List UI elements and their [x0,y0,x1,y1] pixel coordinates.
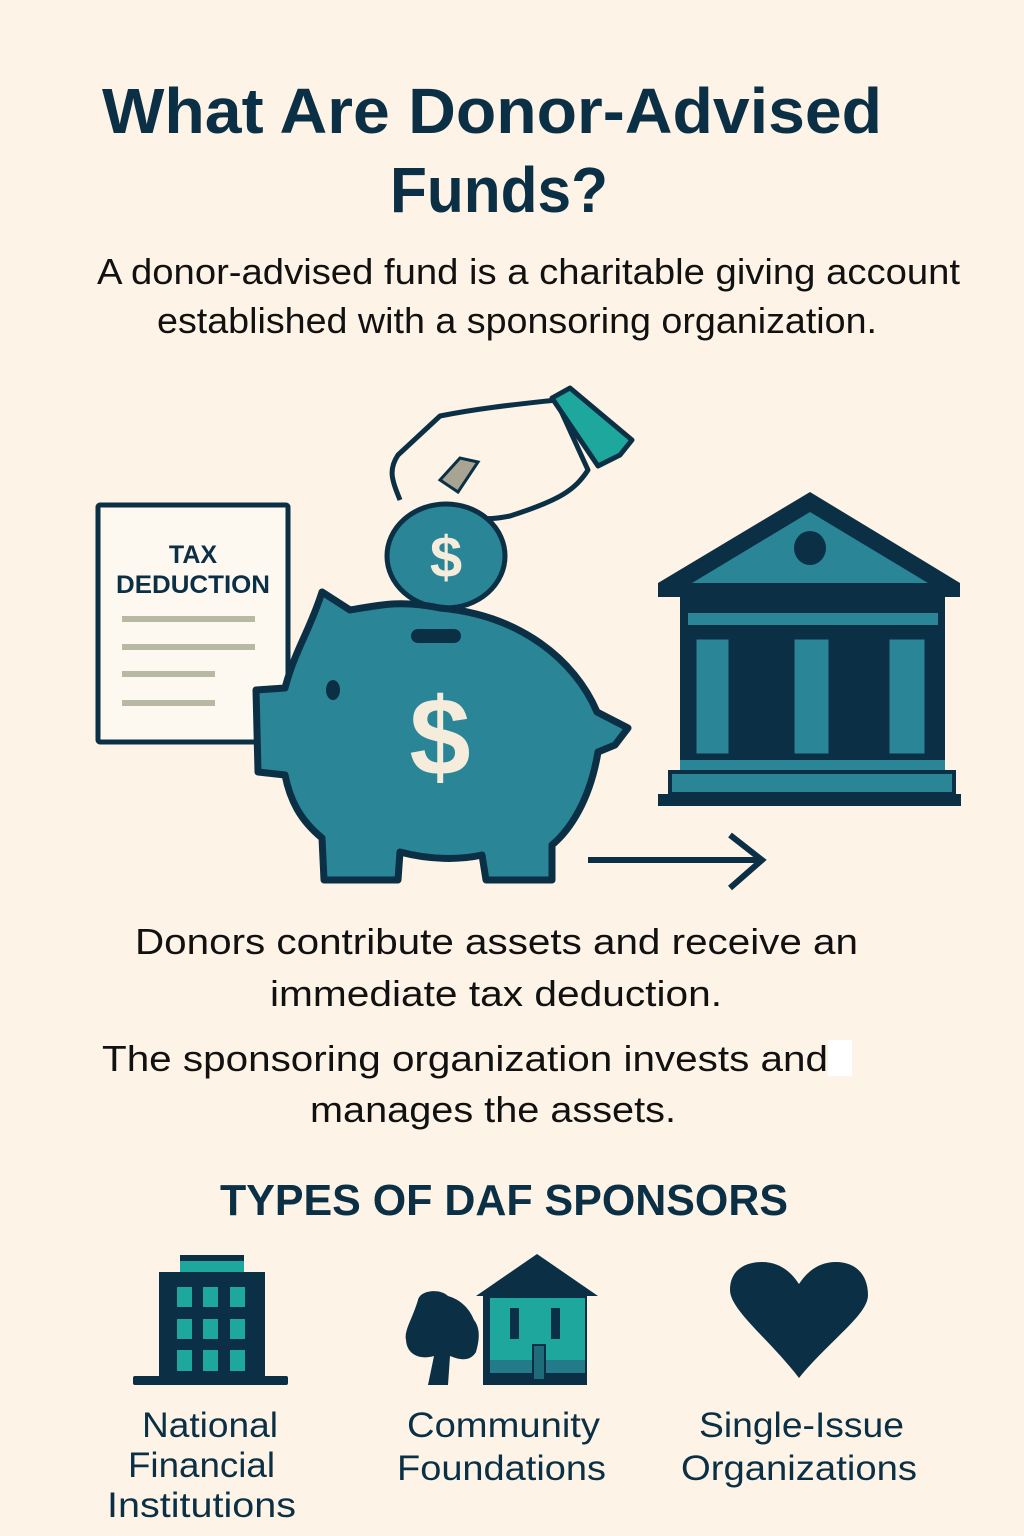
icon: office building [133,1255,288,1385]
sponsor: national financial institutions: Financial [128,1446,275,1485]
icon: piggy bank [256,592,628,880]
icon: coin: $ [430,525,462,590]
icon: coin [387,504,505,608]
icon: house and tree [406,1254,598,1385]
sponsor: national financial institutions [107,1255,296,1525]
sponsor: single-issue organizations: Organizations [681,1449,917,1488]
sponsor: single-issue organizations [681,1262,917,1488]
sponsor: national financial institutions: Institutions [107,1486,296,1525]
sponsor: national financial institutions: National [142,1406,278,1445]
title: What Are Donor-Advised [102,75,882,147]
icon: hand dropping coin [392,388,632,519]
arrow [588,835,762,888]
icon: tax deduction document: DEDUCTION [116,571,270,599]
icon: piggy bank: $ [409,676,471,799]
text: sponsoring organization: The sponsoring organization invests and [102,1038,828,1079]
icon: tax deduction document: TAX [169,541,217,569]
subtitle [97,251,960,341]
sponsor: community foundations: Foundations [397,1449,606,1488]
text: donors contribute: Donors contribute assets and receive an [135,921,858,962]
sponsor: single-issue organizations: Single-Issue [699,1406,904,1445]
sponsor: community foundations [397,1254,606,1488]
text: sponsoring organization: manages the assets. [310,1089,676,1130]
text: donors contribute: immediate tax deduction. [270,973,722,1014]
subtitle: A donor-advised fund is a charitable giving account [97,251,960,292]
icon: tax deduction document [98,505,288,742]
title [102,75,882,226]
icon: heart [730,1262,868,1378]
heading: types of DAF sponsors: TYPES OF DAF SPONSORS [220,1176,788,1225]
icon: bank building [658,492,961,806]
text: donors contribute [135,921,858,1014]
subtitle: established with a sponsoring organization. [157,300,877,341]
text: sponsoring organization [102,1038,852,1130]
title: Funds? [390,154,608,226]
sponsor: community foundations: Community [407,1406,601,1445]
